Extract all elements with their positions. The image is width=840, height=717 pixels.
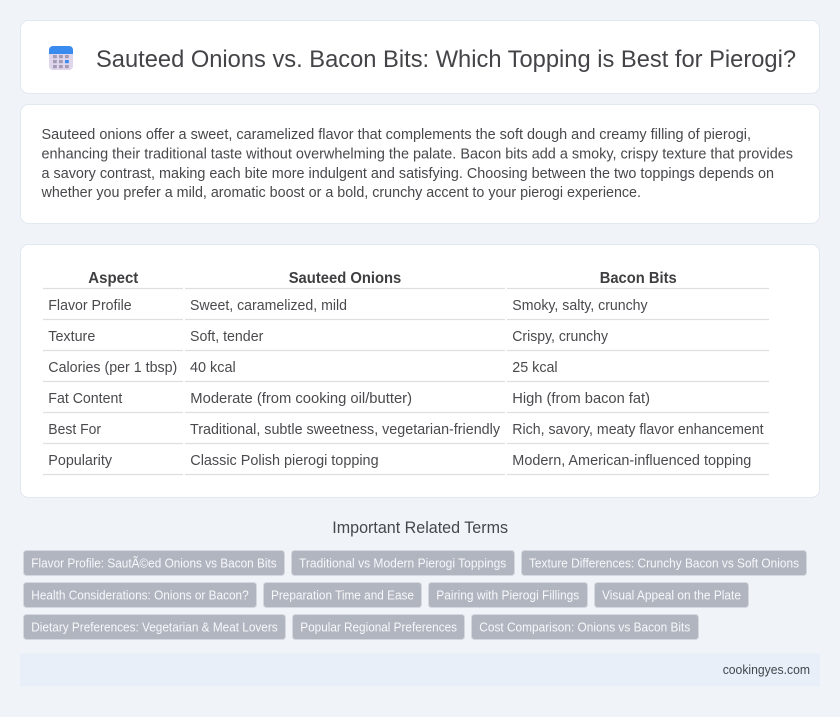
table row: calories: 25 kcal xyxy=(512,360,558,376)
table row: flavor profile: Sweet, caramelized, mild xyxy=(190,298,347,314)
heading: related terms: Important Related Terms xyxy=(332,519,508,537)
tag xyxy=(594,582,748,608)
table row: flavor profile: Smoky, salty, crunchy xyxy=(512,298,648,314)
table row: best for: Best For xyxy=(48,422,101,438)
tag xyxy=(522,550,806,576)
table row: texture: Soft, tender xyxy=(190,329,263,345)
tag: Texture Differences: Crunchy Bacon vs Soft Onions xyxy=(529,556,799,570)
tag xyxy=(292,614,464,640)
tag xyxy=(24,550,284,576)
table row: texture xyxy=(48,329,609,345)
tag: Flavor Profile: SautÃ©ed Onions vs Bacon Bits xyxy=(31,556,277,570)
table row: calories: 40 kcal xyxy=(190,360,236,376)
table row: flavor profile xyxy=(48,298,648,314)
footer source text: cookingyes.com xyxy=(723,663,810,677)
tag xyxy=(292,550,514,576)
table header: Aspect xyxy=(88,270,139,287)
tag: Traditional vs Modern Pierogi Toppings xyxy=(299,556,507,570)
table row: calories: Calories (per 1 tbsp) xyxy=(48,360,177,376)
table row: flavor profile: Flavor Profile xyxy=(48,298,132,314)
table row: texture: Texture xyxy=(48,329,95,345)
table row: best for xyxy=(48,422,764,438)
table row: texture: Crispy, crunchy xyxy=(512,329,609,345)
tag: Pairing with Pierogi Fillings xyxy=(436,588,580,602)
tag xyxy=(24,614,286,640)
text block: intro xyxy=(41,127,793,201)
tag xyxy=(472,614,698,640)
table row: fat content: Moderate (from cooking oil/butter) xyxy=(190,391,412,407)
table header: Sauteed Onions xyxy=(289,270,401,287)
table row: fat content: High (from bacon fat) xyxy=(512,391,650,407)
table row: popularity: Modern, American-influenced topping xyxy=(512,453,751,469)
footer bar xyxy=(20,654,820,686)
text block: intro: Sauteed onions offer a sweet, caramelized flavor that complements the soft dough and creamy filling of pierogi, xyxy=(42,127,751,143)
tag: Health Considerations: Onions or Bacon? xyxy=(31,588,249,602)
table header xyxy=(88,270,677,287)
tag: Visual Appeal on the Plate xyxy=(602,588,741,602)
tag: Cost Comparison: Onions vs Bacon Bits xyxy=(479,620,691,634)
table header: Bacon Bits xyxy=(600,270,677,287)
table row: popularity: Popularity xyxy=(48,453,113,469)
text block: intro: enhancing their traditional taste without overwhelming the palate. Bacon bits add a smoky, crispy texture that provides xyxy=(42,146,793,162)
panel: intro paragraph xyxy=(20,104,820,224)
tag xyxy=(428,582,588,608)
table row: popularity xyxy=(48,453,751,469)
tag xyxy=(264,582,422,608)
table row: best for: Traditional, subtle sweetness, vegetarian-friendly xyxy=(190,422,501,438)
table row: fat content xyxy=(48,391,650,407)
panel: title header xyxy=(20,20,820,94)
table row: fat content: Fat Content xyxy=(48,391,122,407)
table row: popularity: Classic Polish pierogi topping xyxy=(190,453,379,469)
tag xyxy=(24,582,256,608)
tag: Popular Regional Preferences xyxy=(300,620,457,634)
title: Sauteed Onions vs. Bacon Bits: Which Topping is Best for Pierogi? xyxy=(96,46,796,73)
tag: Dietary Preferences: Vegetarian & Meat Lovers xyxy=(31,620,278,634)
tag: Preparation Time and Ease xyxy=(271,588,414,602)
text block: intro: a savory contrast, making each bite more indulgent and satisfying. Choosing between the two toppings depends on xyxy=(42,166,774,182)
panel: comparison table xyxy=(20,244,820,498)
related term tags xyxy=(24,550,806,640)
table row: best for: Rich, savory, meaty flavor enhancement xyxy=(512,422,764,438)
table row: calories xyxy=(48,360,558,376)
icon: calendar xyxy=(49,46,73,70)
text block: intro: whether you prefer a mild, aromatic boost or a bold, crunchy accent to your pierogi experience. xyxy=(41,185,641,201)
